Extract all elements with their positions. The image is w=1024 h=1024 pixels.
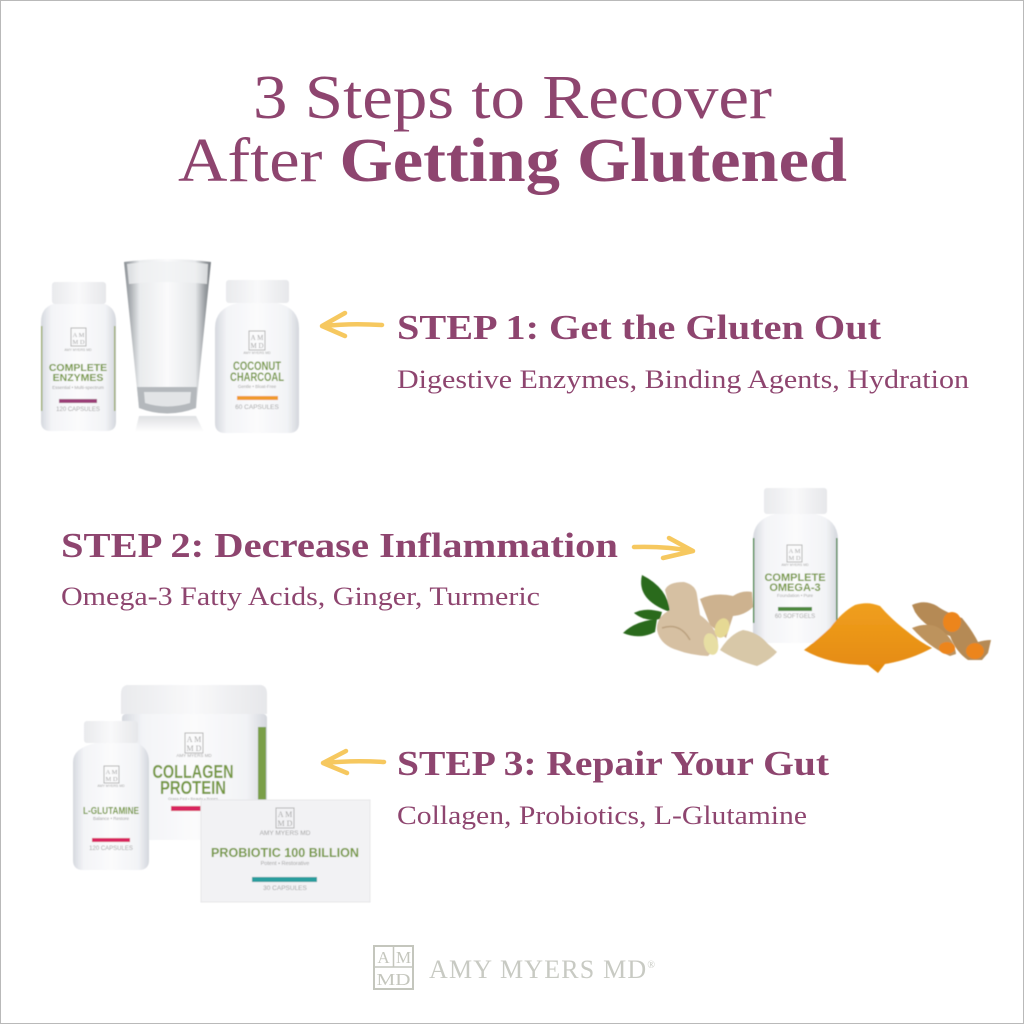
text: step 2 detail: Omega-3 Fatty Acids, Ginger, Turmeric: [61, 582, 540, 611]
arrow: step 3: [323, 751, 384, 773]
heading: step 1: STEP 1: Get the Gluten Out: [397, 308, 881, 347]
icon: probiotic 100 billion box: PROBIOTIC 100 BILLION: [211, 846, 359, 860]
icon: probiotic 100 billion box: AMY MYERS MD: [260, 830, 311, 837]
logo: Amy Myers MD: [374, 946, 655, 989]
logo: Amy Myers MD: AMY MYERS MD: [429, 955, 646, 984]
icon: l-glutamine bottle: 120 CAPSULES: [89, 846, 133, 852]
icon: ginger leaves: [623, 575, 670, 636]
icon: collagen protein tub: PROTEIN: [160, 778, 226, 798]
icon: complete omega-3 bottle: M D: [788, 555, 801, 562]
icon: coconut charcoal bottle: 60 CAPSULES: [235, 404, 280, 411]
icon: coconut charcoal bottle: AMY MYERS MD: [243, 351, 271, 355]
icon: l-glutamine bottle: L-GLUTAMINE: [83, 806, 139, 817]
icon: coconut charcoal bottle: A M: [251, 334, 264, 342]
icon: coconut charcoal bottle: COCONUT: [233, 359, 282, 373]
icon: complete omega-3 bottle: AMY MYERS MD: [781, 563, 809, 567]
icon: l-glutamine bottle: A M: [106, 769, 118, 776]
icon: glass of water: [124, 259, 211, 432]
icon: complete enzymes bottle: M D: [72, 339, 85, 346]
icon: collagen protein tub: AMY MYERS MD: [176, 753, 212, 758]
title: After Getting Glutened: [178, 127, 847, 195]
arrow: step 2: [634, 538, 693, 558]
logo: Amy Myers MD: M: [396, 948, 411, 967]
logo: Amy Myers MD: ®: [647, 960, 655, 971]
icon: probiotic 100 billion box: A M: [278, 810, 292, 819]
icon: collagen protein tub: COLLAGEN: [152, 762, 234, 782]
icon: turmeric powder: [804, 603, 932, 673]
logo: Amy Myers MD: A: [377, 948, 390, 967]
panel: step 2 products: [623, 488, 991, 673]
icon: collagen protein tub: M D: [187, 744, 202, 753]
icon: complete enzymes bottle: Essential • Multi-spectrum: [52, 385, 104, 390]
heading: step 2: STEP 2: Decrease Inflammation: [61, 526, 618, 565]
icon: complete enzymes bottle: A M: [73, 332, 85, 339]
icon: coconut charcoal bottle: CHARCOAL: [230, 370, 284, 384]
text: step 3 detail: Collagen, Probiotics, L-Glutamine: [397, 801, 807, 830]
icon: ginger root: [657, 582, 753, 656]
icon: complete omega-3 bottle: [753, 488, 838, 643]
icon: l-glutamine bottle: M D: [105, 776, 118, 783]
panel: step 3 products: [73, 685, 370, 902]
panel: step 1 products: [41, 259, 299, 433]
icon: l-glutamine bottle: AMY MYERS MD: [97, 784, 125, 788]
icon: complete enzymes bottle: AMY MYERS MD: [64, 348, 92, 352]
icon: collagen protein tub: Grass-Fed • Beauty • Bones: [168, 796, 218, 801]
logo: Amy Myers MD: MD: [376, 970, 410, 989]
icon: turmeric root: [912, 602, 991, 660]
icon: probiotic 100 billion box: 30 CAPSULES: [263, 885, 308, 892]
icon: collagen protein tub: A M: [187, 735, 201, 744]
heading: step 3: STEP 3: Repair Your Gut: [397, 744, 829, 783]
icon: complete enzymes bottle: COMPLETE: [49, 362, 107, 374]
icon: complete omega-3 bottle: OMEGA-3: [769, 582, 821, 594]
icon: coconut charcoal bottle: M D: [250, 342, 264, 350]
icon: l-glutamine bottle: [73, 721, 149, 870]
icon: coconut charcoal bottle: [215, 280, 299, 433]
icon: complete omega-3 bottle: 60 SOFTGELS: [775, 614, 815, 620]
icon: collagen protein tub: [121, 685, 267, 840]
icon: ginger powder: [720, 630, 777, 666]
icon: complete enzymes bottle: [41, 282, 116, 431]
icon: complete enzymes bottle: ENZYMES: [53, 372, 103, 384]
icon: complete omega-3 bottle: COMPLETE: [764, 572, 826, 584]
icon: probiotic 100 billion box: Potent • Restorative: [261, 861, 309, 867]
icon: complete omega-3 bottle: Foundation • Pure: [777, 593, 814, 598]
icon: probiotic 100 billion box: [201, 800, 370, 902]
title: [178, 64, 847, 195]
text: step 1 detail: Digestive Enzymes, Binding Agents, Hydration: [397, 365, 969, 394]
icon: complete enzymes bottle: 120 CAPSULES: [56, 407, 100, 413]
icon: probiotic 100 billion box: M D: [278, 819, 293, 828]
icon: coconut charcoal bottle: Gentle • Bloat-Free: [238, 384, 277, 389]
title: 3 Steps to Recover: [253, 64, 772, 132]
arrow: step 1: [322, 313, 382, 336]
icon: l-glutamine bottle: Balance • Restore: [93, 816, 130, 821]
icon: complete omega-3 bottle: A M: [789, 548, 801, 555]
